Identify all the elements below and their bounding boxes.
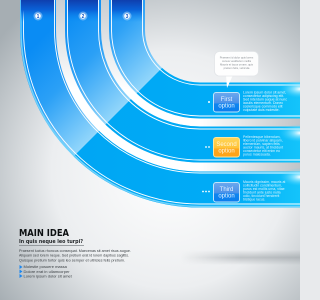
third option text: tristique lacus. [243, 198, 265, 202]
first option card [214, 92, 240, 112]
dot markers second [205, 146, 210, 148]
dot markers third [202, 191, 210, 192]
paragraph: Aliquam sed lorem neque. Sed pretium erat id lorem dapibus sagittis. [19, 253, 129, 258]
icon: number 3 [122, 12, 132, 20]
second option text: elementum, sapien felis [243, 142, 280, 146]
icon: number 2: 2 [82, 14, 85, 20]
third option card [214, 182, 240, 202]
ribbon 2: second option [68, 0, 305, 160]
icon: number 1: 1 [37, 14, 40, 20]
bullet list: Molestie posuere massa [24, 264, 68, 269]
bullet list: Lorem ipsum dolor sit amet [24, 273, 73, 278]
paragraph [19, 248, 131, 262]
first option text: Sed interdum augue at nunc [243, 98, 287, 102]
first option text: scelerisque commodo elit [243, 104, 283, 108]
callout: speech bubble: cursus vestibulum mollis [222, 59, 252, 63]
third option text [243, 180, 285, 202]
callout: speech bubble: Mauris et lacus ornare, quis [220, 62, 254, 66]
second option text [243, 135, 283, 156]
floor shadow [190, 252, 300, 264]
dot marker first [208, 101, 210, 103]
title: MAIN IDEA [19, 228, 69, 239]
first option text: iaculis elementum. Donec [243, 101, 283, 105]
paragraph: Praesent luctus rhoncus consequat. Maecenas sit amet risus augue. [19, 248, 131, 253]
second option card: Second [216, 142, 237, 148]
bullet list: Dolore erat in ullamcorper [24, 269, 70, 274]
subtitle: In quis neque leo turpi? [19, 239, 83, 245]
third option text: odio, tincidunt hendrerit [243, 194, 279, 198]
bullet list [20, 264, 73, 278]
second option card: option [218, 148, 235, 154]
third option text: purus est mollis urna, vitae [243, 187, 285, 191]
third option text: Mauris dignissim, mauris at [243, 180, 285, 184]
third option card: option [218, 194, 235, 200]
icon: number 3: 3 [126, 14, 129, 20]
ribbon top shading [21, 0, 142, 22]
second option text: auctor mauris, at tincidunt [243, 146, 283, 150]
first option card: option [218, 104, 235, 110]
first option card: First [221, 97, 233, 103]
ribbon gaps [60, 0, 305, 167]
right end glows [280, 80, 320, 186]
panel: curved ribbons [21, 0, 320, 206]
ribbon 1: third option [21, 0, 305, 206]
title divider [19, 244, 84, 247]
callout: speech bubble: Praesent id dolor quis lorem [220, 56, 254, 60]
paragraph: Quisque pretium tortor quis leo semper et ultricies felis pretium. [19, 257, 125, 262]
first option text: Lorem ipsum dolor sit amet, [243, 90, 286, 94]
callout: speech bubble [214, 52, 258, 88]
callout: speech bubble: pretium felis, vehicula [224, 66, 250, 70]
second option text: libero id pulvinar aliquam, [243, 138, 283, 142]
first option text [243, 90, 287, 112]
first option text: vulputate duis molestie. [243, 108, 280, 112]
third option text: tincidunt ante justo nulla [243, 190, 281, 194]
second option text: Pellentesque bibendum, [243, 135, 281, 139]
second option text: consectetur elit enim eu [243, 149, 280, 153]
icon: number 2 [78, 12, 88, 20]
third option text: sollicitudin condimentum, [243, 184, 282, 188]
second option card [214, 138, 240, 157]
first option text: consectetur adipiscing elit. [243, 94, 284, 98]
gap shading right [200, 118, 300, 173]
ribbon 3: first option [112, 0, 305, 116]
second option text: purus malesuada. [243, 152, 271, 156]
icon: number 1 [34, 12, 42, 20]
third option card: Third [220, 187, 233, 193]
